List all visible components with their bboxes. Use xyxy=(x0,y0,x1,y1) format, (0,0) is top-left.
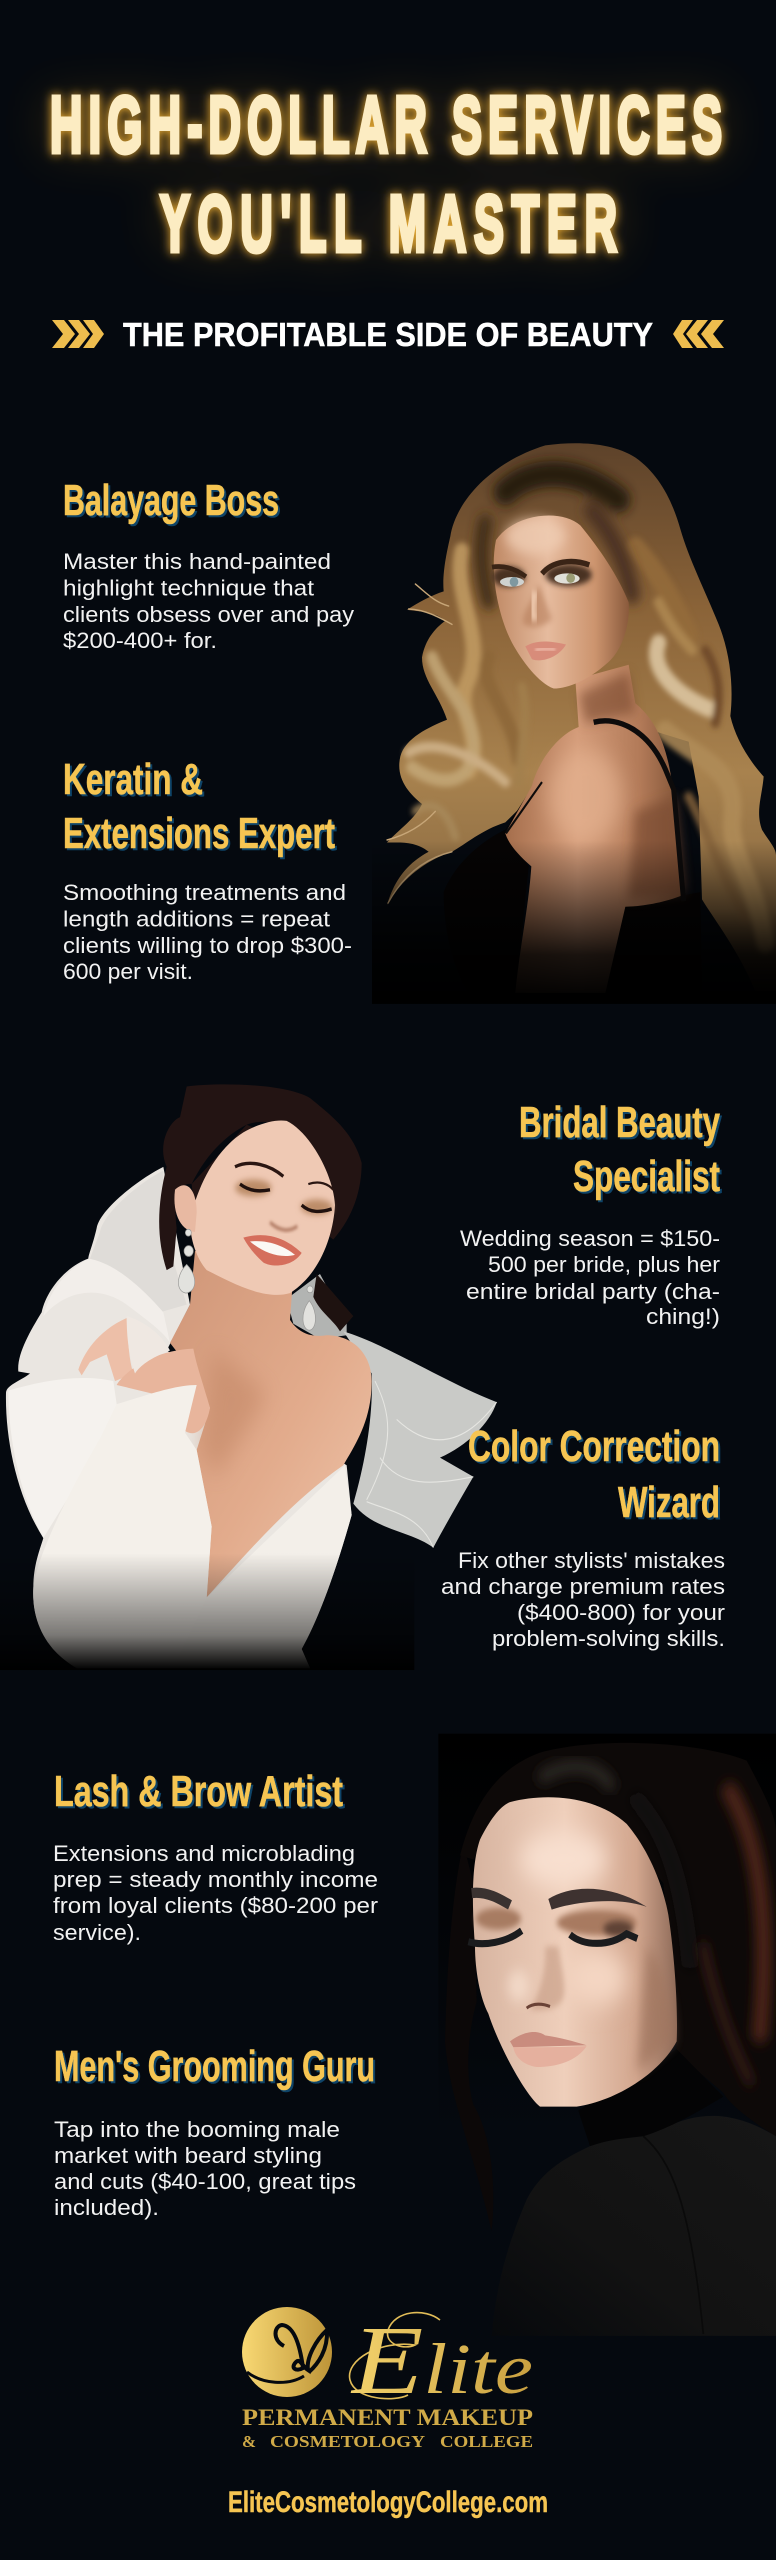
heading xyxy=(63,476,281,527)
body text: ($400-800) for your xyxy=(517,1600,725,1625)
section: Keratin & Extensions Expert xyxy=(63,755,352,984)
icon: right chevrons xyxy=(673,320,724,348)
veil on right xyxy=(343,1331,497,1548)
photo: smiling bride xyxy=(0,1084,497,1670)
heading xyxy=(519,1098,722,1203)
subtitle: THE PROFITABLE SIDE OF BEAUTY xyxy=(123,316,653,353)
facial features xyxy=(235,1163,333,1266)
right dress xyxy=(602,892,702,993)
body text: ching!) xyxy=(646,1304,720,1329)
top and right hair xyxy=(460,1743,776,2136)
section: Men's Grooming Guru xyxy=(54,2042,377,2220)
icon: gold circle with butterfly xyxy=(242,2307,332,2397)
heading: Wizard xyxy=(618,1478,720,1527)
heading: Balayage Boss xyxy=(63,476,279,525)
body text xyxy=(460,1226,720,1329)
heading xyxy=(63,755,337,860)
heading: Specialist xyxy=(575,1154,722,1203)
icon: left chevrons xyxy=(52,320,104,348)
section: Balayage Boss xyxy=(63,476,354,653)
heading: Keratin & xyxy=(65,757,205,806)
heading: Lash & Brow Artist xyxy=(56,1769,345,1818)
left hair strand xyxy=(445,1844,493,2231)
body text xyxy=(53,1841,378,1945)
fold shading xyxy=(43,1259,170,1343)
body text xyxy=(63,880,352,984)
title: HIGH-DOLLAR SERVICES xyxy=(50,79,722,169)
logo tagline xyxy=(242,2432,533,2451)
body text: $200-400+ for. xyxy=(63,628,217,653)
body text: 500 per bride, plus her xyxy=(488,1252,720,1277)
body text: and cuts ($40-100, great tips xyxy=(54,2169,356,2194)
heading: Men's Grooming Guru xyxy=(54,2042,375,2091)
title: YOU'LL MASTER xyxy=(160,178,617,268)
large sleeve panel xyxy=(8,1378,117,1538)
cuff fold xyxy=(127,1316,170,1373)
right hand xyxy=(117,1349,210,1433)
face xyxy=(494,515,629,689)
body text: Fix other stylists' mistakes xyxy=(458,1548,725,1573)
grey veil behind neck xyxy=(287,1274,347,1339)
facial features xyxy=(492,518,592,660)
title: YOU'LL MASTER xyxy=(160,178,617,268)
logo tagline: COSMETOLOGY xyxy=(270,2432,425,2451)
left dress and strap gap xyxy=(444,731,575,993)
logo flourish xyxy=(350,2313,440,2399)
title xyxy=(50,79,722,268)
body text xyxy=(63,549,354,653)
bodice xyxy=(173,1465,352,1668)
heading: Balayage Boss xyxy=(65,478,281,527)
gown, sleeves and left veil xyxy=(6,1167,352,1668)
neck shadow xyxy=(579,672,635,723)
heading: Wizard xyxy=(620,1480,722,1529)
body text: entire bridal party (cha- xyxy=(466,1279,720,1304)
section: Color Correction Wizard xyxy=(441,1422,725,1651)
body text xyxy=(54,2117,356,2220)
logo xyxy=(242,2307,533,2451)
section: Bridal Beauty Specialist xyxy=(460,1098,722,1329)
hair fill behind face xyxy=(192,1125,328,1247)
face xyxy=(190,1120,335,1295)
earrings xyxy=(178,1229,315,1330)
body text: length additions = repeat xyxy=(63,906,330,932)
heading: Extensions Expert xyxy=(65,811,337,860)
body text: from loyal clients ($80-200 per xyxy=(53,1893,378,1918)
section: Lash & Brow Artist xyxy=(53,1767,378,1945)
logo tagline: COLLEGE xyxy=(440,2432,533,2451)
body text: highlight technique that xyxy=(63,576,314,600)
heading xyxy=(54,2042,377,2093)
body text: Master this hand-painted xyxy=(63,549,331,574)
heading: Men's Grooming Guru xyxy=(56,2044,377,2093)
sweater xyxy=(492,2116,776,2336)
hair wisp xyxy=(313,1274,353,1331)
body text xyxy=(441,1548,725,1651)
body text: service). xyxy=(53,1920,141,1945)
bottom fade xyxy=(0,1553,414,1670)
photo: woman with balayage hair xyxy=(372,443,776,1004)
body text: prep = steady monthly income xyxy=(53,1867,378,1892)
body text: Smoothing treatments and xyxy=(63,880,346,905)
logo: PERMANENT MAKEUP xyxy=(242,2405,533,2430)
title: HIGH-DOLLAR SERVICES xyxy=(50,79,722,169)
hair strands and highlights xyxy=(387,474,765,943)
body text: clients willing to drop $300- xyxy=(63,933,352,958)
neck, chest and arm xyxy=(170,1251,372,1597)
body text: and charge premium rates xyxy=(441,1574,725,1599)
hair sheen xyxy=(543,1767,764,2081)
body text: Tap into the booming male xyxy=(54,2117,340,2142)
logo: Elite xyxy=(350,2307,533,2415)
body text: problem-solving skills. xyxy=(492,1626,725,1651)
turtleneck xyxy=(578,2049,723,2146)
body text: included). xyxy=(54,2195,159,2220)
dark backdrop xyxy=(438,1734,776,2129)
heading: Specialist xyxy=(573,1152,720,1201)
body text: Extensions and microblading xyxy=(53,1841,355,1866)
heading: Keratin & xyxy=(63,755,203,804)
body text: market with beard styling xyxy=(54,2143,322,2168)
sleeve xyxy=(33,1385,212,1668)
left hand xyxy=(78,1318,133,1381)
heading: Extensions Expert xyxy=(63,809,335,858)
back shadow xyxy=(629,797,685,899)
hair xyxy=(387,443,776,991)
ear xyxy=(174,1185,197,1232)
heading: Lash & Brow Artist xyxy=(54,1767,343,1816)
face xyxy=(473,1797,677,2107)
title: YOU'LL MASTER xyxy=(160,178,617,268)
logo tagline: & xyxy=(242,2432,256,2451)
chest shadow xyxy=(200,1351,267,1477)
website URL: EliteCosmetologyCollege.com xyxy=(228,2486,548,2519)
heading xyxy=(468,1422,722,1529)
body text: 600 per visit. xyxy=(63,959,193,984)
sweater seam xyxy=(643,2136,703,2334)
skin highlight xyxy=(549,749,622,844)
neck, shoulder and arm xyxy=(505,665,685,993)
veil folds xyxy=(367,1381,497,1548)
body text: clients obsess over and pay xyxy=(63,602,354,627)
hair xyxy=(159,1084,362,1270)
bottom fade xyxy=(372,841,776,1004)
straps xyxy=(506,721,684,901)
facial features xyxy=(468,1832,673,2073)
body text: Wedding season = $150- xyxy=(460,1226,720,1251)
veil top shade xyxy=(90,1171,187,1312)
photo: dark-haired woman with closed eyes xyxy=(438,1734,776,2336)
title: HIGH-DOLLAR SERVICES xyxy=(50,79,722,169)
